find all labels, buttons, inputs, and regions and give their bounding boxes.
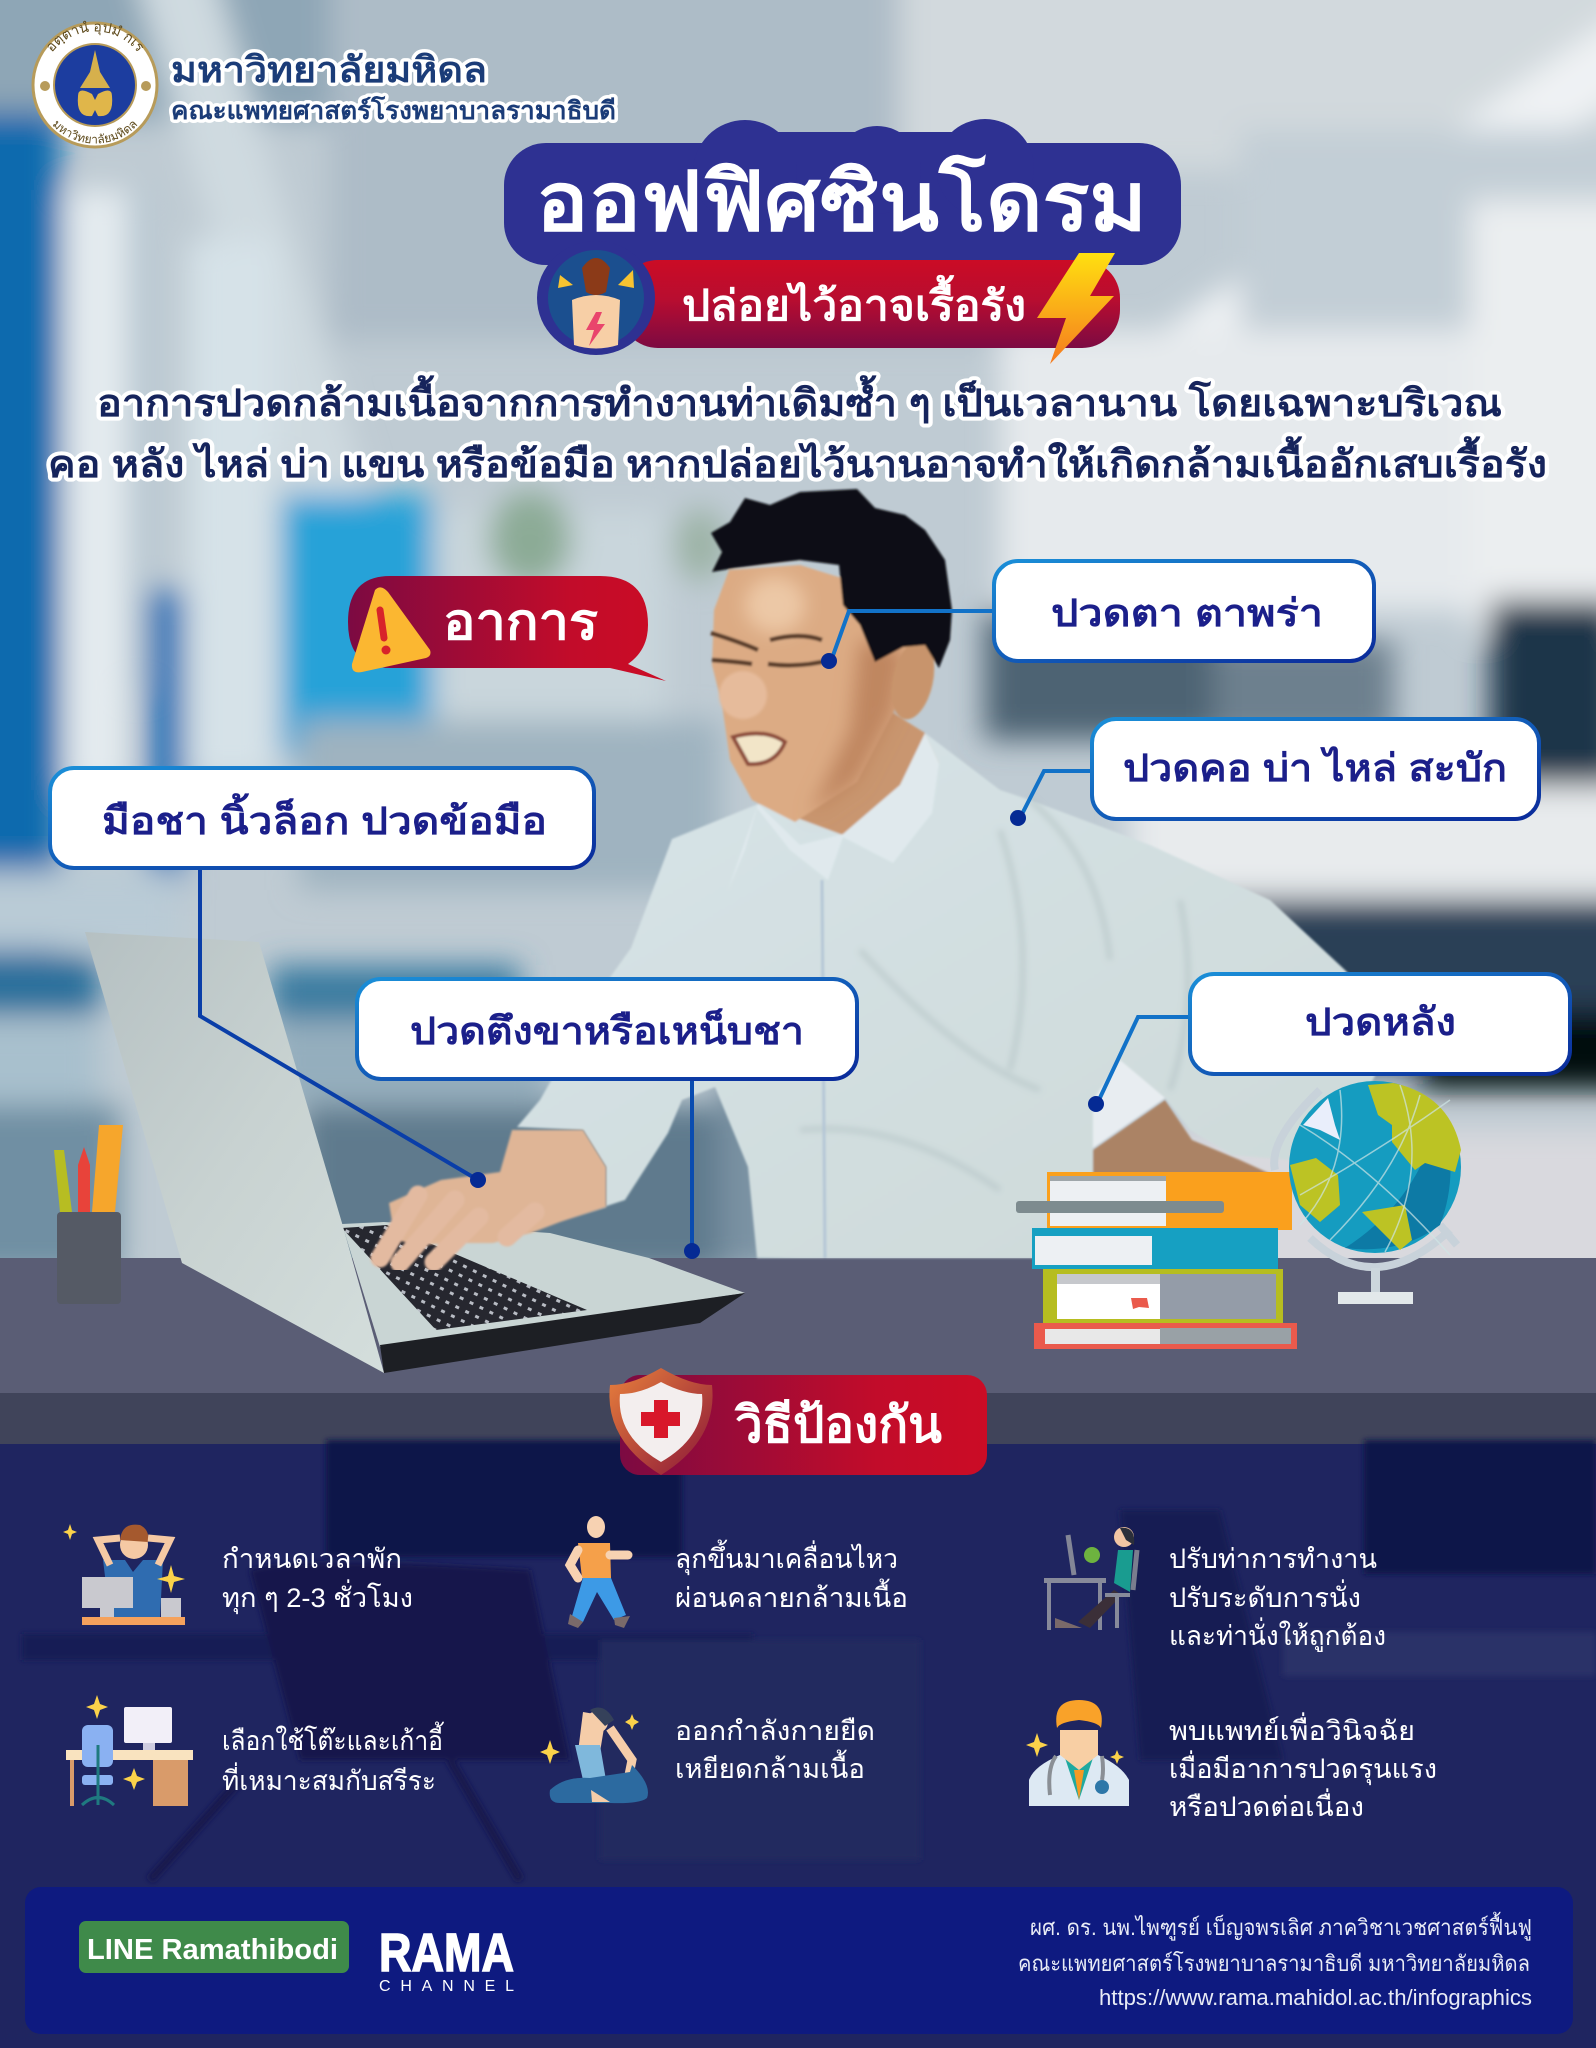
title block [504,119,1181,364]
symptoms heading bubble: อาการ [443,594,598,650]
tip 4: furniture: เลือกใช้โต๊ะและเก้าอี้ [222,1721,444,1756]
globe sphere [1289,1081,1461,1253]
teal book [1032,1228,1278,1269]
back arm skin [1093,1100,1275,1176]
tip 1: breaks: ทุก ๆ 2-3 ชั่วโมง [222,1579,413,1615]
tip 3: posture: ปรับท่าการทำงาน [1169,1544,1377,1574]
face [712,565,915,822]
tip 1: breaks [63,1524,413,1625]
icon: walking person [568,1516,630,1628]
tip 3: posture [1044,1527,1386,1652]
tip 2: move: ลุกขึ้นมาเคลื่อนไหว [675,1539,898,1576]
brows and closed eyes [711,633,830,665]
callout: hands: มือชา นิ้วล็อก ปวดข้อมือ [102,793,547,843]
forehead highlight [745,577,805,633]
icon: shield [609,1368,713,1475]
forearm and hand [380,1130,606,1263]
laptop [85,932,745,1373]
callout: eyes: ปวดตา ตาพร่า [1051,593,1323,635]
icon: lightning bolt [1037,253,1115,364]
RAMA Channel logo: RAMA [379,1923,514,1983]
desk [0,1258,1596,1394]
line: wrist [200,868,478,1180]
line: eye [831,611,994,661]
laptop lid [85,932,384,1373]
continents [1368,1083,1461,1172]
icon: desk and chair [66,1695,193,1806]
desk lower band [0,1393,1596,1445]
tip 5: stretch [540,1708,875,1803]
globe grid [1300,1085,1450,1255]
tip 3: posture: ปรับระดับการนั่ง [1169,1579,1361,1613]
grey book [1043,1269,1283,1323]
icon: ergonomic desk [1044,1527,1137,1630]
laptop underside [380,1293,745,1373]
prevention heading [609,1368,987,1475]
prevention heading: วิธีป้องกัน [734,1397,942,1453]
background office photo [0,0,1596,1290]
face shadow [810,640,905,815]
seal motto: อตฺตานํ อุปมํ กเร [48,20,144,52]
tip 1: breaks: กำหนดเวลาพัก [222,1544,402,1574]
credits: https://www.rama.mahidol.ac.th/infographics [1099,1985,1532,2010]
ruler [92,1125,123,1212]
seal name: มหาวิทยาลัยมหิดล [53,120,138,144]
tip 6: doctor: เมื่อมีอาการปวดรุนแรง [1169,1750,1437,1786]
intro text: อาการปวดกล้ามเนื้อจากการทำงานท่าเดิมซ้ำ ๆ เป็นเวลานาน โดยเฉพาะบริเวณ [97,375,1502,425]
shirt placket [822,880,825,1258]
callout: legs [357,979,857,1079]
man [517,489,1400,1258]
icon: yoga stretch [540,1708,648,1803]
title blob [504,119,1181,265]
tip 3: posture: และท่านั่งให้ถูกต้อง [1169,1617,1386,1652]
collar [728,733,939,890]
footer panel [25,1887,1573,2034]
tip 6: doctor [1026,1700,1437,1822]
icon: doctor [1026,1700,1129,1806]
callout: neck and shoulders: ปวดคอ บ่า ไหล่ สะบัก [1123,746,1507,790]
globe [1274,1081,1461,1304]
orange book [1047,1172,1292,1230]
prevention panel background [0,1440,1596,2048]
icon: back pain [537,241,655,355]
LINE badge [79,1921,349,1973]
books [1016,1172,1297,1349]
credits: ผศ. ดร. นพ.ไพฑูรย์ เบ็ญจพรเลิศ ภาควิชาเวชศาสตร์ฟื้นฟู [1030,1912,1532,1941]
subtitle text: ปล่อยไว้อาจเรื้อรัง [682,274,1026,329]
keyboard [342,1225,587,1330]
line: leg [690,1079,694,1251]
laptop base [342,1222,745,1347]
tip 6: doctor: หรือปวดต่อเนื่อง [1169,1788,1364,1822]
cup [57,1212,121,1304]
tip 4: furniture: ที่เหมาะสมกับสรีระ [222,1762,436,1796]
tip 5: stretch: เหยียดกล้ามเนื้อ [675,1749,865,1784]
shirt tail highlight [1093,1060,1165,1148]
callout: legs: ปวดตึงขาหรือเหน็บชา [410,1008,804,1053]
mouth [733,733,785,764]
callout: neck and shoulders [1092,719,1539,819]
tip 6: doctor: พบแพทย์เพื่อวินิจฉัย [1169,1712,1415,1746]
credits: คณะแพทยศาสตร์โรงพยาบาลรามาธิบดี มหาวิทยาลัยมหิดล [1018,1951,1530,1976]
callout: hands [50,768,594,868]
tip 5: stretch: ออกกำลังกายยืด [675,1716,875,1746]
LINE badge: LINE Ramathibodi [87,1934,338,1966]
icon: relaxing worker [63,1524,185,1625]
tablet [1016,1201,1224,1213]
intro text: คอ หลัง ไหล่ บ่า แขน หรือข้อมือ หากปล่อยไว้นานอาจทำให้เกิดกล้ามเนื้ออักเสบเรื้อรัง [48,436,1547,486]
tip 2: move: ผ่อนคลายกล้ามเนื้อ [675,1578,908,1613]
pencil cup [54,1125,123,1304]
credits [1018,1912,1532,2010]
icon: warning triangle [352,587,430,672]
red pencil [78,1147,90,1212]
faculty name: คณะแพทยศาสตร์โรงพยาบาลรามาธิบดี [171,95,616,125]
hair [711,489,952,668]
bookmark [1131,1298,1149,1309]
neck [757,713,939,835]
tip 4: furniture [66,1695,444,1806]
callout: back: ปวดหลัง [1305,1002,1456,1044]
yellow pencil [54,1150,72,1212]
shirt folds [800,800,1188,1190]
line: back [1097,1017,1189,1104]
callout: eyes [994,561,1374,661]
symptoms heading bubble [348,576,666,681]
line: shoulder [1020,771,1091,818]
red book [1034,1323,1297,1349]
connector lines [200,611,1189,1251]
tip 2: move [568,1516,908,1628]
nose [719,671,767,719]
connector dots [470,653,1104,1259]
shirt [517,733,1400,1258]
ear [885,637,941,723]
RAMA Channel logo: CHANNEL [379,1978,514,1995]
intro text [48,375,1547,486]
logo: Mahidol University seal [32,20,158,148]
globe stand [1274,1090,1457,1267]
university name: มหาวิทยาลัยมหิดล [171,49,487,90]
callout: back [1190,974,1570,1074]
red pill [620,260,1120,348]
title text: ออฟฟิศซินโดรม [536,155,1147,248]
